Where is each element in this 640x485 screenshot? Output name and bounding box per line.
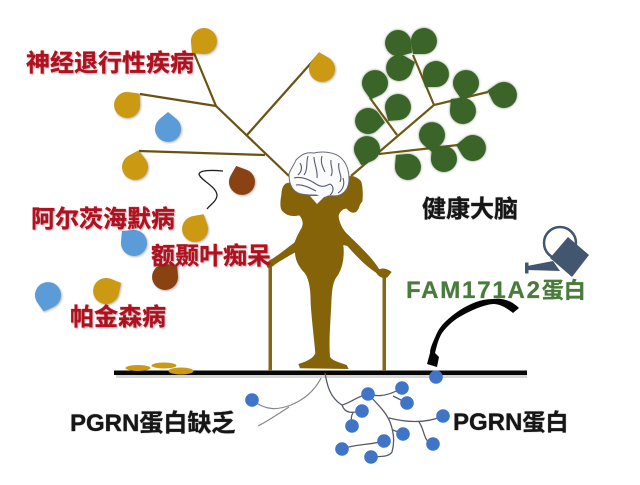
label: Parkinson's disease: 帕金森病 [70, 303, 166, 331]
gold, blue and brown falling leaves [31, 23, 337, 315]
green healthy leaves [349, 23, 520, 185]
healthy root lines [325, 373, 443, 457]
label: healthy brain: 健康大脑 [422, 196, 518, 223]
fallen leaves on ground [126, 362, 194, 374]
squiggle line [199, 170, 223, 209]
label: FAM171A2 protein: FAM171A2蛋白 [406, 277, 586, 304]
ground line [114, 370, 527, 378]
PGRN root network [245, 370, 450, 464]
depleted grey root [252, 378, 321, 426]
label: PGRN deficiency: PGRN蛋白缺乏 [70, 410, 235, 437]
label: Alzheimer's disease: 阿尔茨海默病 [31, 206, 175, 233]
walking canes [268, 265, 386, 371]
label: frontotemporal dementia: 额颞叶痴呆 [151, 243, 271, 270]
brain [289, 152, 349, 204]
label: PGRN protein: PGRN蛋白 [453, 409, 568, 436]
watering can [525, 227, 589, 277]
left diseased branches [139, 53, 320, 176]
label: neurodegenerative disease: 神经退行性疾病 [26, 50, 194, 77]
two-faced elderly figure [267, 176, 392, 369]
right healthy branches [351, 55, 488, 176]
curved arrow [427, 299, 519, 367]
protein nodes [245, 370, 450, 464]
